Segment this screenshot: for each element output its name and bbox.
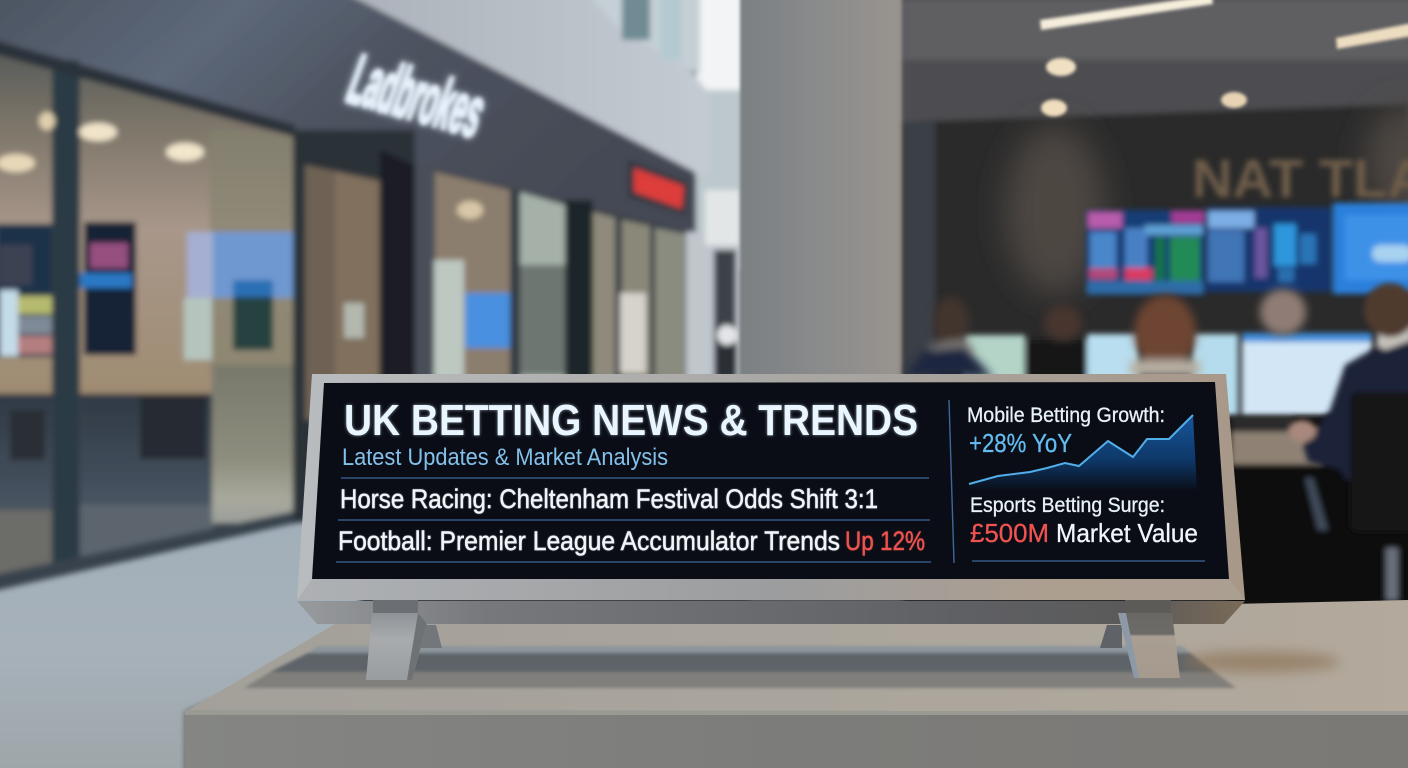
door (293, 130, 415, 550)
headline row: horse racing: Horse Racing: Cheltenham Festival Odds Shift 3:1 (340, 484, 878, 514)
rear feet (420, 625, 1122, 648)
left foot (366, 613, 427, 680)
wall light pools (1005, 105, 1408, 295)
window mullions (53, 60, 79, 570)
subtitle: Latest Updates & Market Analysis (342, 444, 668, 471)
bottom bar highlight (297, 579, 1245, 600)
headline row: football: Up 12% (845, 526, 925, 556)
screens behind left glass (0, 224, 52, 357)
stat label: esports betting surge: Esports Betting Surge: (970, 494, 1165, 517)
stat label: mobile betting growth: Mobile Betting Growth: (967, 404, 1165, 427)
background: blurred betting shop street scene: Ladbrokes (341, 39, 492, 154)
stat value: +28% YoY: +28% YoY (969, 428, 1072, 458)
right wall edge (686, 232, 742, 430)
warm light patch (1180, 651, 1340, 673)
area chart: mobile growth (969, 415, 1197, 490)
upper wall with windows (320, 0, 710, 175)
foot brackets above lip (373, 600, 1171, 613)
lower glass slate reflection (0, 394, 52, 564)
floor (0, 522, 360, 768)
foreground person in suit (1288, 283, 1408, 532)
dark fascia (0, 0, 695, 232)
lower right office area (1228, 416, 1408, 606)
second window (415, 165, 435, 420)
concrete column (740, 0, 903, 395)
sky gap (696, 0, 746, 100)
storefront building (0, 0, 750, 620)
stat value: market value (970, 518, 1198, 548)
metal frame (297, 374, 1245, 600)
posters in window (187, 232, 295, 298)
table shadow bands (244, 646, 1236, 688)
vertical divider (949, 400, 954, 563)
ceiling lights (39, 112, 55, 130)
lower lip (297, 601, 1245, 624)
headline: UK BETTING NEWS & TRENDS (344, 396, 918, 445)
rule 2 (338, 519, 930, 521)
digital display unit (297, 374, 1245, 680)
stat value: market value: £500M (970, 518, 1049, 548)
stat value: market value: Market Value (1056, 518, 1198, 548)
rule 4 (972, 560, 1205, 562)
ceiling lights (1040, 0, 1408, 116)
desk monitors (963, 333, 1372, 416)
concrete table (185, 600, 1408, 768)
screen (312, 382, 1229, 579)
right interior room (903, 0, 1408, 620)
narrow windows (593, 212, 615, 420)
rule 1 (341, 477, 929, 479)
rule 3 (336, 561, 931, 563)
right foot (1118, 613, 1180, 678)
wall screens (1086, 203, 1408, 295)
headline row: football: Football: Premier League Accumulator Trends (338, 526, 840, 556)
red sign (628, 160, 688, 215)
left glass window (0, 50, 52, 400)
background people (905, 289, 1306, 378)
